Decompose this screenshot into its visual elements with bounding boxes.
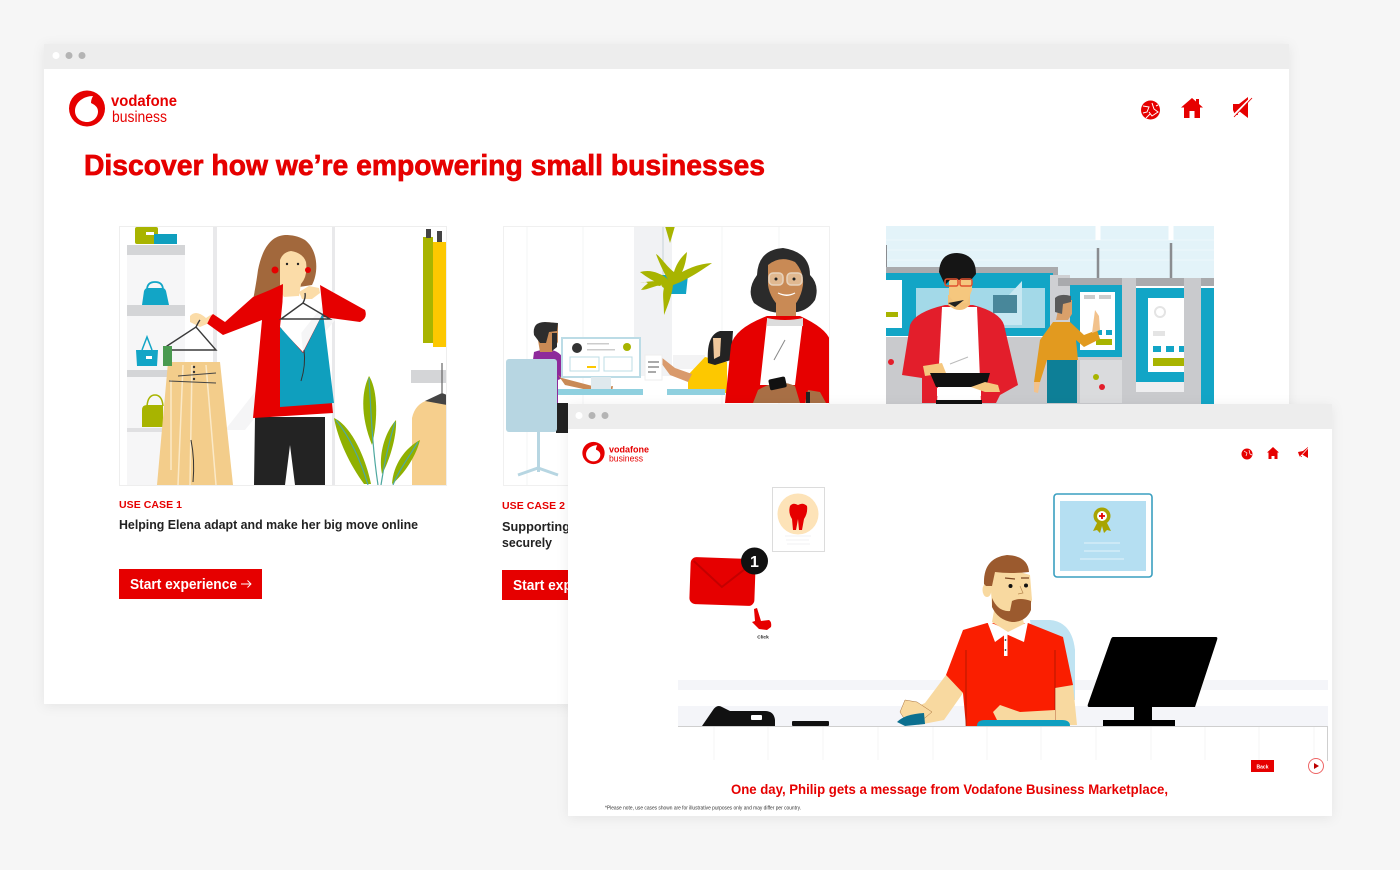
illustration: Elena in her clothing shop (119, 226, 447, 486)
Elena figure (190, 235, 366, 485)
worker in orange jumper (1034, 295, 1100, 403)
button: start experience 2: Start experience (513, 578, 620, 594)
desktop monitor (558, 338, 643, 395)
buttons (1005, 639, 1006, 641)
tan trousers on hanger (157, 346, 233, 485)
text: use case 1: Helping Elena adapt and make her big move online (119, 517, 418, 532)
office chair (506, 359, 558, 475)
hangers (167, 293, 330, 350)
browser title bar (44, 44, 1289, 69)
panel: back browser window (44, 44, 1289, 704)
control panels (888, 278, 1214, 404)
card: certificate (1054, 494, 1152, 577)
hair and beard (984, 555, 1029, 586)
panel: front browser window (568, 404, 1332, 816)
plant (334, 376, 420, 485)
text: use case 2: Supporting (502, 519, 570, 534)
button: back (1251, 760, 1274, 772)
computer monitor (1088, 637, 1217, 726)
front browser title bar (568, 404, 1332, 429)
button: start experience 1 (119, 569, 262, 599)
office background (527, 226, 779, 486)
front window dots (576, 412, 608, 419)
desk phone (702, 706, 829, 726)
red polo shirt (946, 623, 1073, 726)
card: tooth icon (772, 488, 824, 552)
button: start experience 1: Start experience (130, 577, 237, 593)
icon: small globe (1242, 448, 1252, 460)
icon: message envelope with badge: 1 (750, 554, 759, 571)
icon: globe (1141, 100, 1160, 120)
illustration: factory with tablet user (886, 226, 1218, 404)
forearm over shirt (993, 705, 1055, 722)
icon: click hand (752, 608, 771, 640)
vodafone business logo small (582, 442, 649, 464)
button: play (1308, 758, 1324, 774)
woman with glasses in red blazer (725, 248, 830, 403)
chair (1030, 620, 1075, 700)
collar (987, 621, 1028, 642)
hanging plant (640, 226, 712, 315)
factory background (886, 226, 1218, 404)
text: use case 2 (502, 500, 570, 550)
vodafone business logo: business (112, 109, 167, 126)
arms (905, 675, 1077, 725)
icon: click hand: Click (757, 634, 769, 640)
text: use case 2: USE CASE 2 (502, 500, 565, 512)
illustration: small office team (503, 226, 830, 486)
footnote: *Please note, use cases shown are for illustrative purposes only and may differ per country. (605, 806, 801, 812)
handbags (136, 282, 169, 427)
text: use case 1: USE CASE 1 (119, 499, 182, 511)
icon: home (1181, 98, 1203, 118)
hanging clothes (411, 229, 447, 485)
left hand, mouse and keyboard (900, 700, 932, 722)
text: use case 2: securely (502, 535, 553, 550)
vodafone business logo: vodafone (111, 93, 177, 110)
desk timeline line (678, 726, 1328, 761)
seated man at computer (527, 322, 613, 433)
icon: message envelope with badge (689, 548, 768, 606)
woman with document (645, 331, 733, 395)
text: use case 1 (119, 499, 418, 532)
background desk bands (678, 680, 1328, 726)
icon: small home (1267, 447, 1279, 459)
icon: muted speaker (1233, 97, 1252, 118)
vodafone business logo small: vodafone (609, 444, 649, 456)
vodafone business logo (69, 90, 177, 126)
illustration: Philip at his desk (897, 555, 1077, 726)
icon: small muted speaker (1298, 446, 1310, 458)
window dots (52, 52, 86, 59)
button: start experience 2 (502, 570, 645, 600)
main heading: Discover how we’re empowering small businesses (84, 150, 765, 182)
vodafone business logo small: business (609, 454, 643, 464)
shop shelves (127, 226, 335, 486)
button: back: Back (1257, 764, 1269, 770)
caption: One day, Philip gets a message from Vodafone Business Marketplace, (731, 781, 1168, 797)
man with glasses and tablet (902, 253, 1018, 404)
neck and head (992, 605, 1024, 632)
